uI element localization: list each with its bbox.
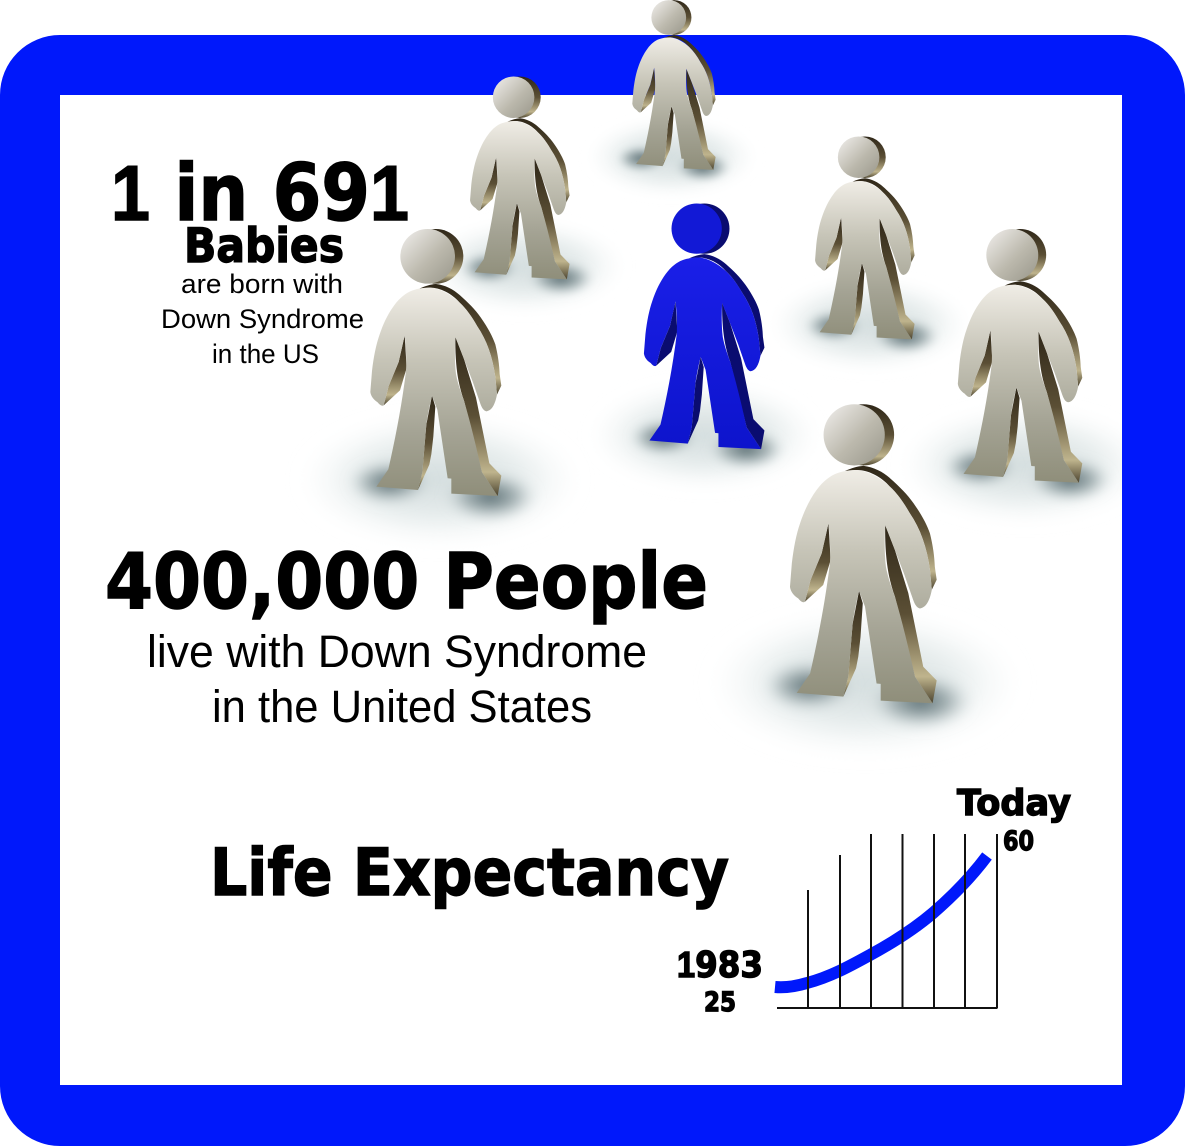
- stat: 1 in 691 babies: [111, 149, 409, 369]
- ground shadows: [300, 118, 1150, 754]
- figure: large left: [370, 229, 501, 496]
- figure: right: [958, 229, 1082, 483]
- stat: 1 in 691 babies: 1 in 691: [111, 149, 409, 239]
- line chart: life expectancy: Today: [957, 783, 1071, 824]
- figure: upper right: [815, 136, 915, 339]
- figure: top centre: [632, 0, 716, 170]
- heading: life expectancy: Life Expectancy: [210, 836, 729, 911]
- line chart: life expectancy: [677, 783, 1071, 1018]
- stat: 1 in 691 babies: are born with: [181, 269, 343, 299]
- stat: 400,000 people: 400,000 People: [105, 538, 708, 627]
- stat: 1 in 691 babies: Down Syndrome: [161, 304, 364, 334]
- figure: bottom: [790, 404, 937, 703]
- figure: upper left: [470, 76, 570, 279]
- stat: 400,000 people: in the United States: [212, 681, 592, 732]
- stat: 400,000 people: [105, 538, 708, 732]
- line chart: life expectancy: 25: [704, 987, 736, 1018]
- stat: 400,000 people: live with Down Syndrome: [147, 626, 647, 677]
- line chart: life expectancy: 60: [1003, 826, 1034, 857]
- line chart: life expectancy: 1983: [677, 944, 763, 986]
- stat: 1 in 691 babies: Babies: [184, 219, 344, 274]
- stat: 1 in 691 babies: in the US: [212, 339, 319, 369]
- figure: blue highlighted person: [644, 203, 764, 449]
